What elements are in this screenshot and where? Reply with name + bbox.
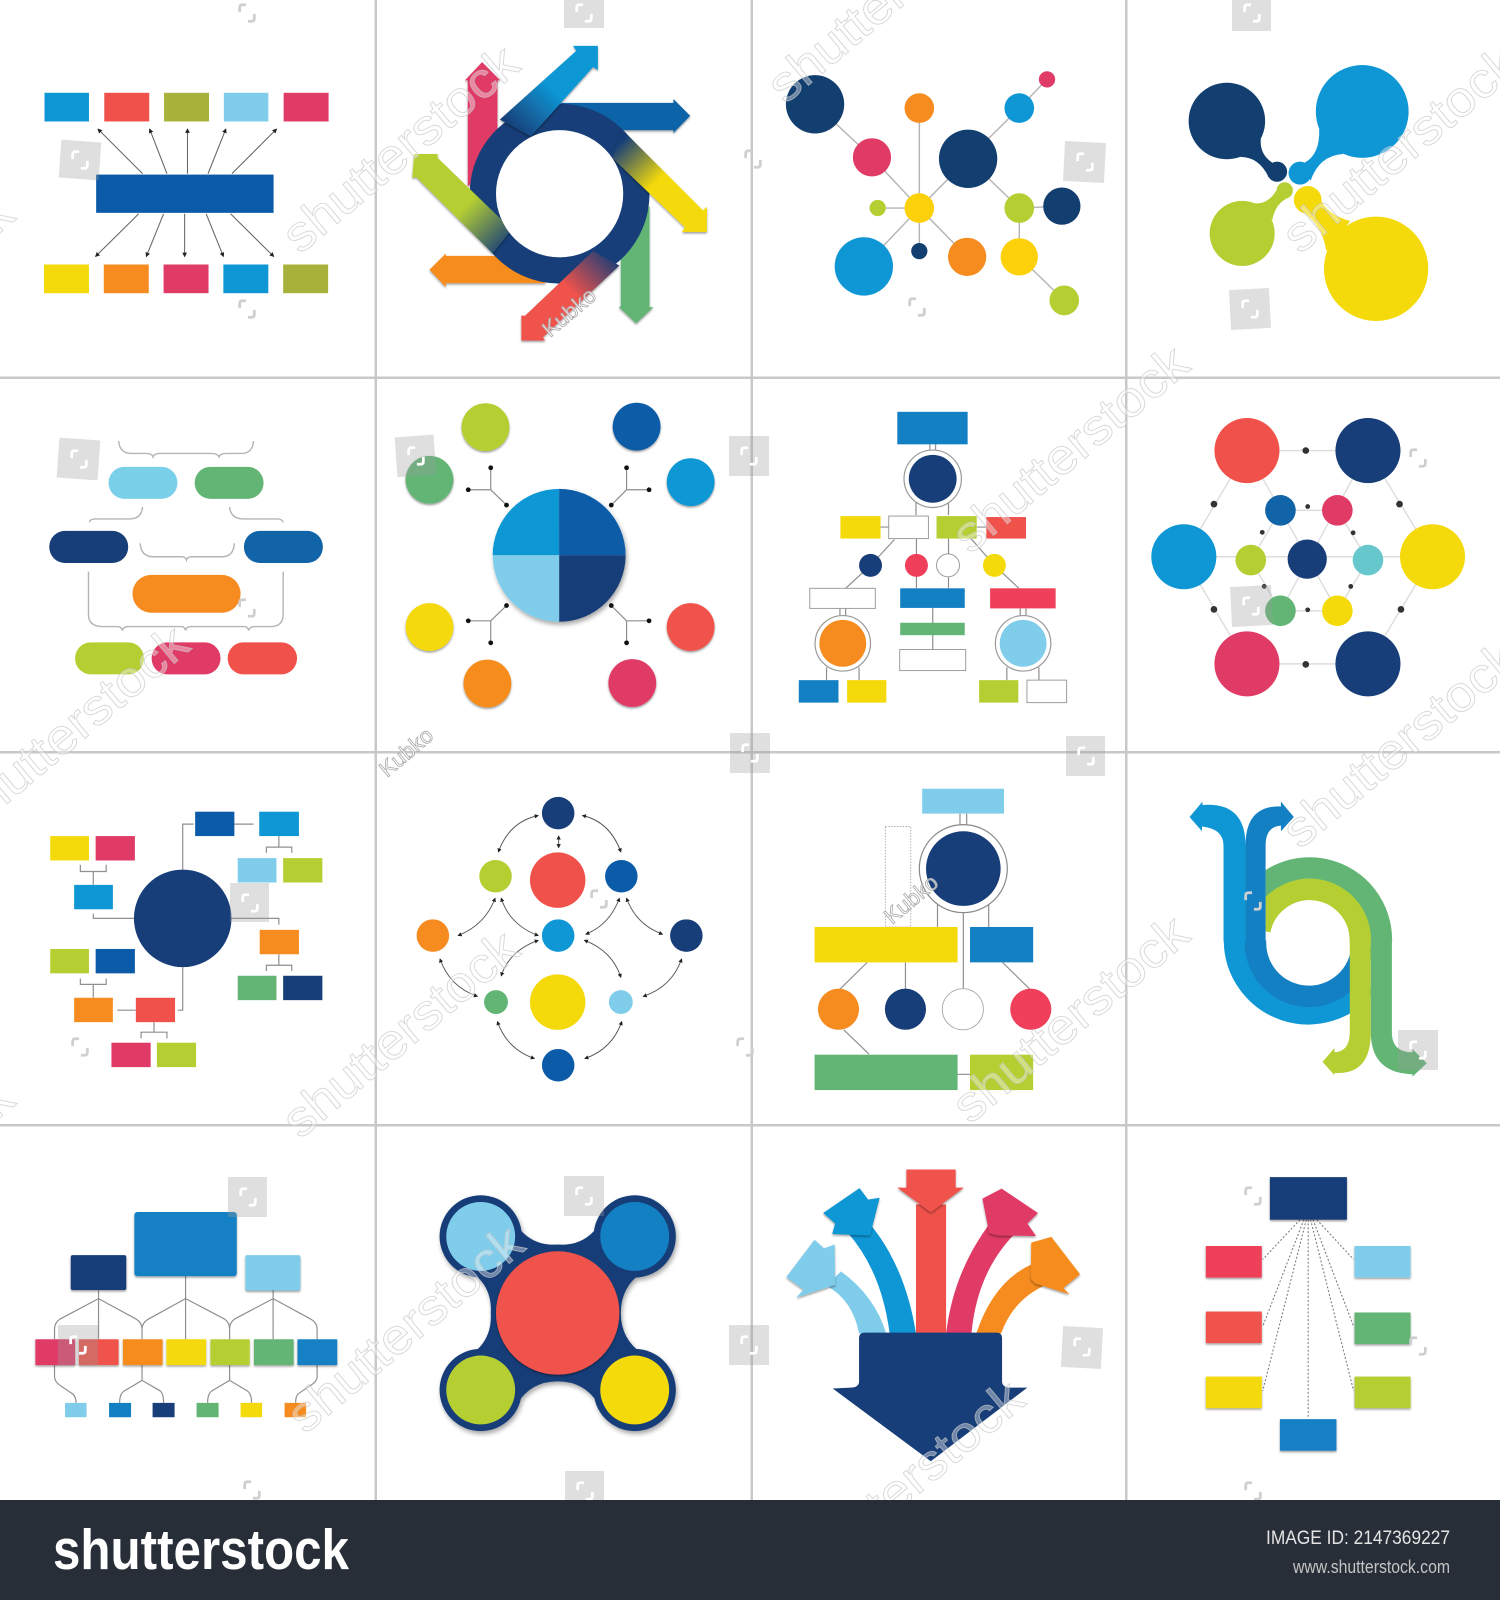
panel: mind map with central circle bbox=[50, 812, 322, 1067]
panel: circles with curved arrows bbox=[417, 797, 703, 1081]
panel: five arrows into big arrow bbox=[786, 1169, 1080, 1461]
watermark text: shutterstock bbox=[271, 33, 530, 263]
panel: pie with eight satellites bbox=[406, 403, 715, 707]
arrow: blue up-right bbox=[1246, 802, 1294, 941]
blue droplet bbox=[1289, 65, 1409, 185]
nodes bbox=[786, 71, 1081, 315]
footer image id: IMAGE ID: 2147369227 bbox=[1266, 1528, 1450, 1549]
connector lines bbox=[827, 444, 1039, 680]
boxes bbox=[50, 812, 322, 1067]
watermark text: shutterstock bbox=[941, 333, 1200, 563]
watermark text: shutterstock bbox=[276, 1213, 535, 1443]
boxes bbox=[1206, 1177, 1411, 1451]
watermark author: Kubko bbox=[374, 723, 438, 782]
satellite circles bbox=[406, 403, 715, 707]
footer url: www.shutterstock.com bbox=[1292, 1557, 1450, 1577]
panel: org chart with circle and rectangles bbox=[815, 789, 1051, 1090]
pills bbox=[49, 467, 323, 674]
arrow: lime down-left bbox=[1323, 939, 1371, 1075]
connector arrows bbox=[96, 129, 276, 256]
watermark text: shutterstock bbox=[776, 1368, 1035, 1598]
panel: pills and braces bbox=[49, 441, 323, 674]
large ring and circle bbox=[919, 825, 1007, 913]
panel: dotted hierarchy bbox=[1206, 1177, 1411, 1451]
bottom row boxes bbox=[44, 264, 328, 293]
colored circles bbox=[446, 1202, 669, 1424]
top row boxes bbox=[44, 93, 329, 121]
footer bar bbox=[0, 1500, 1500, 1600]
links bbox=[815, 79, 1064, 300]
ring hole bbox=[496, 130, 623, 257]
watermark text: shutterstock bbox=[941, 903, 1200, 1133]
top boxes bbox=[71, 1212, 300, 1290]
dashed box bbox=[885, 827, 911, 927]
branch connectors bbox=[466, 465, 651, 645]
arrow: light blue bbox=[786, 1240, 886, 1334]
small dots bbox=[1211, 447, 1404, 668]
yellow droplet bbox=[1294, 186, 1428, 321]
ring outlines bbox=[815, 450, 1051, 671]
center circle bbox=[496, 1251, 619, 1375]
panel: molecule network bbox=[786, 71, 1081, 315]
lime droplet bbox=[1210, 182, 1293, 266]
panel: four droplet blobs bbox=[1189, 65, 1428, 321]
pie chart bbox=[493, 489, 626, 622]
panel: hierarchy with paper boxes bbox=[35, 1212, 337, 1417]
arrow: red bbox=[897, 1169, 964, 1334]
watermark text: shutterstock bbox=[271, 918, 530, 1148]
arrow: pink bbox=[946, 1189, 1038, 1334]
lower circles bbox=[818, 989, 1051, 1030]
hexagon lines bbox=[1184, 451, 1433, 664]
arrow: blue bbox=[823, 1188, 916, 1334]
braces bbox=[88, 441, 283, 630]
hex circles bbox=[1151, 418, 1465, 696]
circles bbox=[417, 797, 703, 1081]
boxes bbox=[815, 789, 1033, 1090]
green top arcs bbox=[1247, 868, 1381, 942]
bottom row boxes bbox=[65, 1403, 306, 1417]
arrow: orange bbox=[976, 1237, 1080, 1334]
icon: gradient arrows bbox=[412, 46, 707, 341]
watermark author: Kubko bbox=[879, 870, 943, 929]
tree circles bbox=[819, 455, 1047, 667]
arrow: blue up-left bbox=[1190, 802, 1246, 941]
blue bottom arcs bbox=[1235, 940, 1367, 1014]
icon: solid arrows bbox=[430, 62, 690, 323]
central circle bbox=[134, 870, 231, 967]
panel: circle and box tree bbox=[799, 412, 1067, 703]
tree boxes bbox=[799, 412, 1067, 703]
big navy arrow bbox=[833, 1333, 1027, 1461]
ring bbox=[470, 104, 650, 284]
panel: rectangles mind map bbox=[44, 93, 329, 293]
panel: pinwheel arrows ring bbox=[412, 46, 707, 341]
middle row boxes bbox=[35, 1339, 337, 1365]
panel: hexagon network bbox=[1151, 418, 1465, 696]
watermark author bbox=[374, 283, 943, 929]
tree lines bbox=[55, 1276, 317, 1403]
navy blob bbox=[440, 1195, 676, 1431]
navy droplet bbox=[1189, 83, 1287, 182]
neck and connectors bbox=[840, 814, 1030, 1074]
panel: four-lobed circle diagram bbox=[440, 1195, 676, 1431]
dotted lines bbox=[1263, 1220, 1354, 1417]
branches bbox=[80, 824, 292, 1038]
arrow: green down-right bbox=[1371, 939, 1427, 1077]
panel: intertwined curved arrows bbox=[1190, 802, 1427, 1077]
watermark author: Kubko bbox=[537, 283, 601, 342]
footer logo: shutterstock bbox=[53, 1518, 349, 1582]
curved arrows bbox=[440, 816, 682, 1059]
central bar bbox=[96, 175, 274, 213]
